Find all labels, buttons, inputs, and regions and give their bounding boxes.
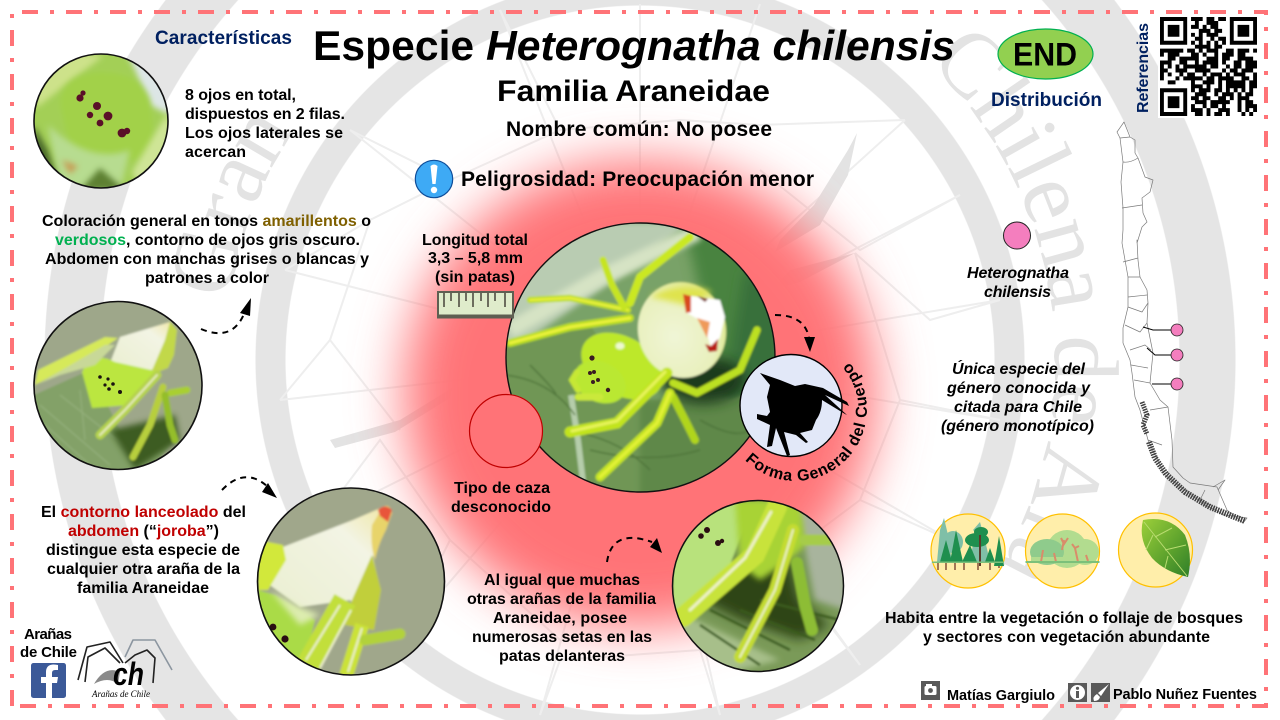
text: total length [422, 232, 528, 286]
text: abdomen: El contorno lanceolado del [41, 504, 246, 521]
text: abdomen: familia Araneidae [77, 580, 209, 597]
curved label: general body shape: Forma General del Cuerpo [746, 364, 867, 481]
badge: endemic: END [1013, 36, 1077, 72]
text: setae [467, 572, 656, 665]
text: setae: otras arañas de la familia [467, 591, 656, 608]
red glow behind spider [404, 160, 876, 628]
heading: characteristics: Características [155, 28, 292, 49]
icon: ruler [437, 292, 514, 318]
text: colouration [42, 213, 371, 287]
text: colouration: Abdomen con manchas grises o blancas y [45, 251, 369, 268]
background watermark web and lettering [175, 4, 1119, 715]
arrow: to setae photo [607, 538, 662, 562]
common name: Nombre común: No posee [506, 118, 772, 141]
text: eyes: Los ojos laterales se [185, 125, 343, 142]
text: hunting type [451, 480, 551, 516]
family subtitle: Familia Araneidae [497, 75, 770, 108]
photo: main spider [500, 220, 780, 500]
text: monotypic genus: citada para Chile [954, 399, 1082, 416]
logo: Arañas de Chile [78, 640, 172, 699]
text: monotypic genus: Única especie del [952, 359, 1086, 378]
icon: body shape silhouette [740, 354, 849, 456]
text: eyes: acercan [185, 144, 246, 161]
species name: chilensis [984, 284, 1051, 301]
arrow: to body silhouette [775, 315, 815, 352]
Facebook label: de Chile [20, 644, 77, 661]
arrow: photo to colouration [201, 298, 251, 333]
text: colouration: verdosos, contorno de ojos gris oscuro. [55, 232, 360, 249]
logo: Arañas de Chile: Arañas de Chile [91, 689, 150, 699]
icon: danger info [415, 160, 453, 198]
QR code [1158, 15, 1261, 118]
text: monotypic genus [941, 359, 1094, 435]
text: setae: numerosas setas en las [472, 629, 652, 646]
arrow: to abdomen photo [222, 477, 277, 498]
text: monotypic genus: (género monotípico) [941, 418, 1094, 435]
text: setae: Al igual que muchas [484, 572, 640, 589]
text: setae: patas delanteras [499, 648, 625, 665]
text: eyes: dispuestos en 2 filas. [185, 106, 345, 123]
text: abdomen [41, 504, 246, 597]
text: abdomen: distingue esta especie de [46, 542, 240, 559]
legend dot [1004, 222, 1030, 249]
credit: information and illustration: Pablo Nuñez Fuentes [1113, 687, 1257, 703]
text: colouration: Coloración general en tonos amarillentos o [42, 213, 371, 230]
species name [967, 265, 1069, 301]
map of Chile [1117, 122, 1247, 523]
icon: leaf [1118, 513, 1192, 587]
background watermark web and lettering: Chilena de Ara [942, 34, 1119, 579]
logo: Arañas de Chile: ch [113, 656, 144, 692]
text: hunting type: Tipo de caza [454, 480, 550, 497]
text: hunting type: desconocido [451, 499, 551, 516]
photo: abdomen detail [255, 485, 450, 680]
text: eyes: 8 ojos en total, [185, 87, 296, 104]
icon: hunting type circle [470, 394, 542, 468]
background watermark web and lettering: Gran [175, 117, 293, 291]
text: eyes [185, 87, 345, 161]
icon: forest [931, 514, 1005, 588]
Facebook label [20, 626, 77, 661]
badge: endemic [998, 29, 1093, 79]
danger level: Peligrosidad: Preocupación menor [461, 168, 814, 191]
text: total length: (sin patas) [435, 269, 515, 286]
text: total length: 3,3 – 5,8 mm [428, 250, 523, 267]
photo: front legs [670, 498, 846, 675]
credit: photo: Matías Gargiulo [947, 688, 1055, 704]
title: Especie Heterognatha chilensis [313, 22, 955, 69]
credit: photo [921, 681, 1055, 704]
text: monotypic genus: género conocida y [946, 380, 1091, 397]
credit: information and illustration [1068, 683, 1257, 703]
label: references: Referencias [1135, 23, 1152, 113]
icon: facebook [31, 663, 66, 698]
species name: Heterognatha [967, 265, 1069, 282]
text: habitat: y sectores con vegetación abundante [923, 629, 1210, 646]
distribution points [1143, 324, 1183, 390]
text: colouration: patrones a color [145, 270, 269, 287]
text: abdomen: abdomen (“joroba”) [68, 523, 219, 540]
photo: spider front view [30, 300, 210, 475]
photo: eyes [33, 53, 169, 189]
Facebook label: Arañas [24, 626, 72, 643]
text: abdomen: cualquier otra araña de la [47, 561, 240, 578]
text: habitat [885, 610, 1243, 646]
heading: distribution: Distribución [991, 90, 1102, 111]
icon: shrubs [1026, 514, 1100, 588]
text: setae: Araneidae, posee [493, 610, 627, 627]
text: habitat: Habita entre la vegetación o follaje de bosques [885, 610, 1243, 627]
text: total length: Longitud total [422, 232, 528, 249]
